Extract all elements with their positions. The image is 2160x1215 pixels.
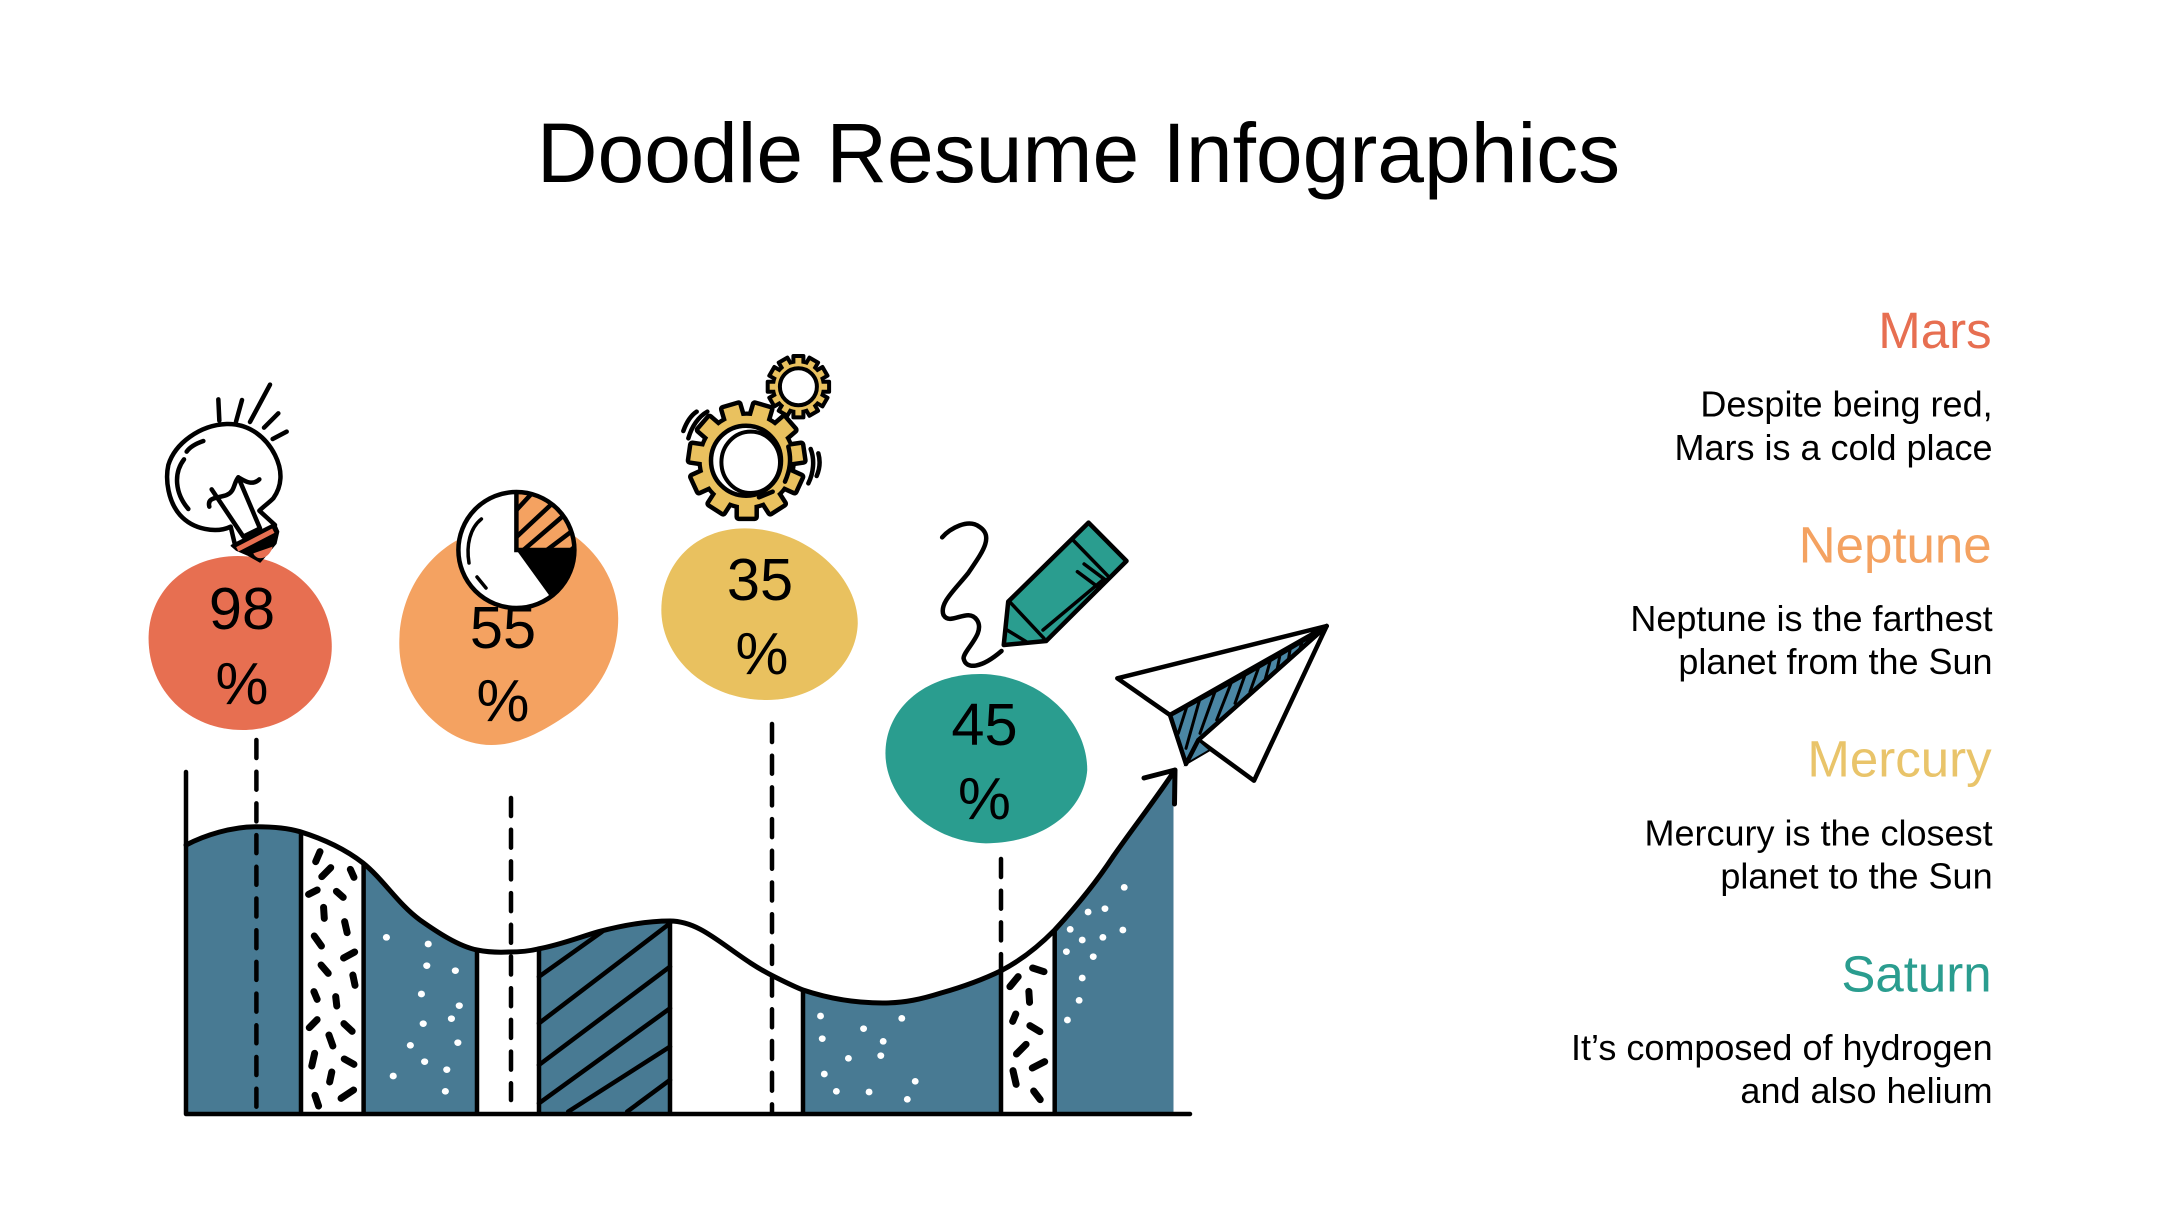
icon: small gear xyxy=(768,356,829,417)
heading: Mars xyxy=(1878,302,1992,359)
blob: yellow xyxy=(661,528,858,700)
diagonal hatch band xyxy=(539,923,670,1112)
icon: large gear xyxy=(683,402,820,519)
chart trend arrow xyxy=(186,770,1175,1003)
legend: Mercury xyxy=(1644,731,1993,896)
description: and also helium xyxy=(1740,1070,1993,1111)
metric: 35 percent xyxy=(661,356,858,700)
blob: red xyxy=(149,556,332,730)
description: It’s composed of hydrogen xyxy=(1571,1027,1993,1068)
blob: orange xyxy=(399,523,618,745)
heading: Mercury xyxy=(1807,731,1992,788)
description: Neptune is the farthest xyxy=(1630,598,1993,639)
legend: Neptune xyxy=(1630,517,1993,682)
area chart xyxy=(186,724,1190,1114)
description: Mars is a cold place xyxy=(1674,427,1993,468)
chart fill bands xyxy=(186,760,1174,1114)
value: 98 xyxy=(209,575,275,642)
value: 35 xyxy=(727,546,793,613)
band dividers xyxy=(298,834,1057,1112)
metric: 45 percent xyxy=(885,523,1127,843)
description: planet from the Sun xyxy=(1678,641,1993,682)
value: 55 xyxy=(470,594,536,661)
heading: Neptune xyxy=(1799,517,1992,574)
icon: light bulb xyxy=(167,385,287,562)
icon: pie chart xyxy=(458,490,585,608)
metric: 98 percent xyxy=(149,385,332,730)
metric: 55 percent xyxy=(399,490,618,745)
title: Doodle Resume Infographics xyxy=(537,106,1620,200)
value: 45 xyxy=(951,691,1018,758)
blob: teal xyxy=(885,674,1087,843)
icon: paper plane xyxy=(1117,626,1327,781)
percent sign: % xyxy=(477,667,529,734)
confetti band 2 xyxy=(1010,968,1045,1100)
percent sign: % xyxy=(216,650,268,717)
percent sign: % xyxy=(958,765,1011,832)
heading: Saturn xyxy=(1841,946,1992,1003)
description: planet to the Sun xyxy=(1720,856,1993,896)
legend: Mars xyxy=(1674,302,1993,468)
percent sign: % xyxy=(736,620,788,687)
confetti band 1 xyxy=(309,852,355,1106)
description: Mercury is the closest xyxy=(1644,812,1993,854)
description: Despite being red, xyxy=(1700,384,1993,424)
legend: Saturn xyxy=(1571,946,1993,1111)
dashed connector lines xyxy=(256,724,1001,1112)
white dots right xyxy=(817,884,1128,1103)
white dots left xyxy=(383,934,463,1095)
icon: pencil with squiggle xyxy=(942,523,1127,666)
chart axes xyxy=(186,772,1190,1114)
